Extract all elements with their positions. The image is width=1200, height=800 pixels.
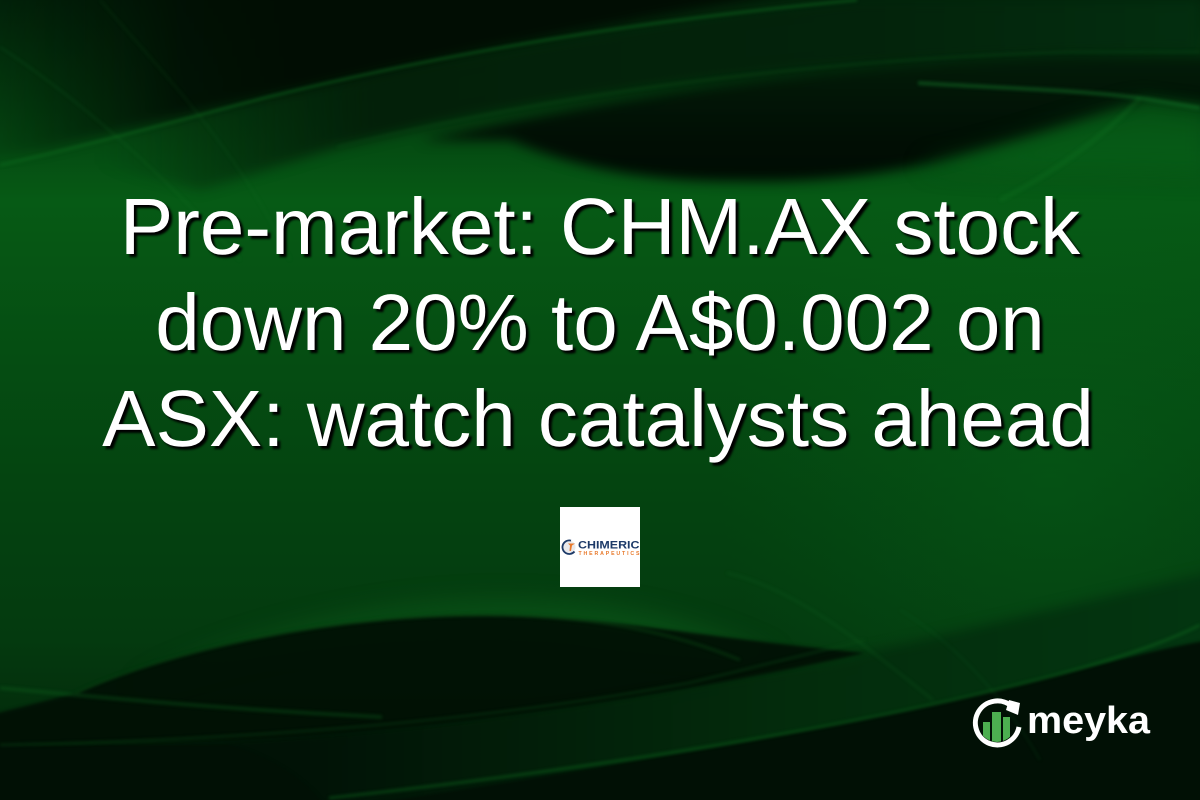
wordmark: meyka bbox=[1027, 700, 1151, 742]
title bbox=[102, 182, 1094, 467]
title: Pre-market: CHM.AX stock bbox=[120, 182, 1080, 271]
icon: circular arrow with bars bbox=[975, 700, 1020, 745]
title: down 20% to A$0.002 on bbox=[155, 278, 1045, 367]
logo wordmark bbox=[578, 540, 640, 557]
icon: Chimeric emblem bbox=[562, 540, 576, 554]
logo wordmark: THERAPEUTICS bbox=[578, 551, 640, 557]
logo wordmark: CHIMERIC bbox=[578, 540, 640, 552]
title: ASX: watch catalysts ahead bbox=[102, 374, 1094, 463]
company logo: Chimeric Therapeutics bbox=[560, 507, 640, 587]
Meyka logo bbox=[972, 698, 1151, 748]
